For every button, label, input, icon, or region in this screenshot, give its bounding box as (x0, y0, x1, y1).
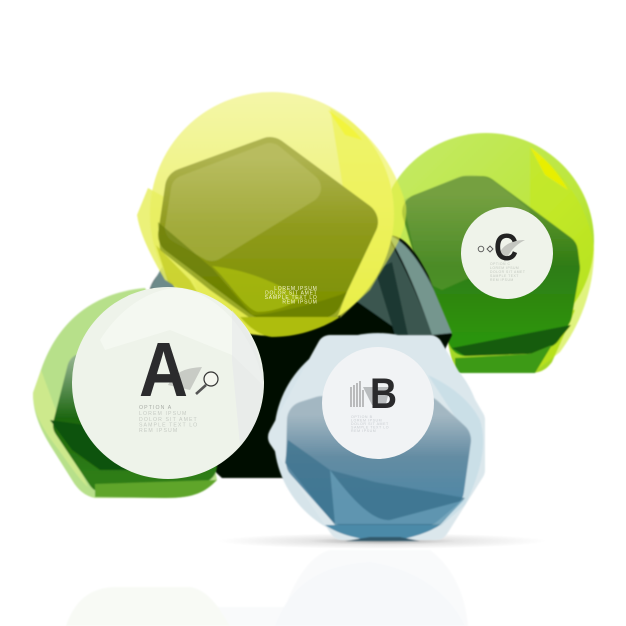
sphere B: blue (274, 333, 483, 541)
sphere A white disc (72, 287, 264, 479)
sphere A body (33, 288, 217, 498)
sphere C: green (378, 133, 594, 373)
sphere A caption: SAMPLE TEXT LO (139, 422, 198, 428)
floor shadow (217, 533, 547, 549)
yellow sphere caption: LOREM IPSUM (274, 286, 318, 292)
sphere A letter: A (139, 327, 188, 413)
sphere C white disc (461, 207, 553, 299)
floor reflection (66, 550, 468, 626)
sphere B white disc (322, 347, 434, 459)
sphere C caption: LOREM IPSUM (490, 266, 519, 270)
yellow sphere caption: DOLOR SIT AMET (265, 290, 318, 296)
yellow sphere body (137, 92, 406, 337)
sphere B body (274, 333, 483, 541)
sphere B caption: LOREM IPSUM (351, 418, 382, 422)
sphere C caption: REM IPSUM (490, 278, 514, 282)
icon: circle and diamond (478, 246, 493, 252)
sphere B caption: OPTION B (351, 415, 373, 419)
sphere B caption: SAMPLE TEXT LO (351, 426, 389, 430)
sphere C body (378, 133, 594, 373)
sphere A caption: LOREM IPSUM (139, 411, 187, 417)
sphere C caption: SAMPLE TEXT (490, 274, 519, 278)
sphere C caption: DOLOR SIT AMET (490, 270, 525, 274)
dark central triangle (150, 235, 452, 478)
sphere C letter: C (494, 227, 518, 269)
yellow sphere caption: SAMPLE TEXT LO (265, 295, 318, 301)
sphere B caption: DOLOR SIT AMET (351, 422, 389, 426)
sphere A: green left (33, 287, 264, 498)
sphere Y: yellow top (137, 92, 406, 337)
sphere B letter: B (370, 370, 397, 418)
sphere C caption: OPTION C (490, 262, 510, 266)
icon: vertical bars (351, 381, 363, 407)
sphere A caption: DOLOR SIT AMET (139, 417, 198, 423)
icon: magnifying glass (196, 372, 218, 394)
yellow sphere caption: REM IPSUM (282, 300, 318, 306)
sphere A caption: REM IPSUM (139, 428, 178, 434)
sphere A caption: OPTION A (139, 405, 172, 411)
sphere B caption: REM IPSUM (351, 429, 376, 433)
